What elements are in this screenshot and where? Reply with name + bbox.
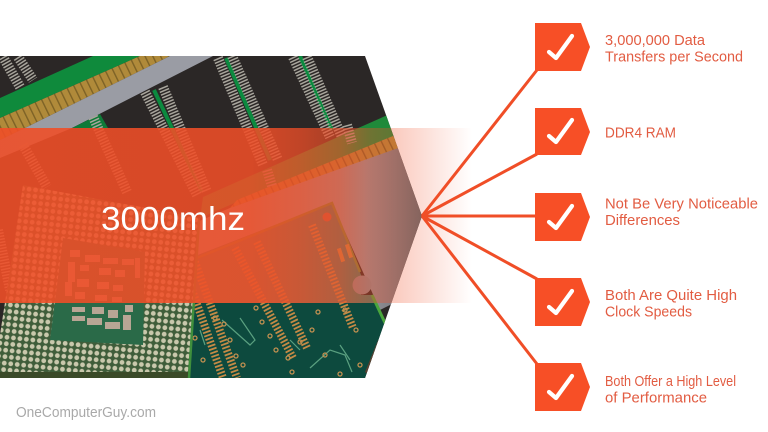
label: 3,000,000 Data Transfers per Second: Transfers per Second [605,48,743,66]
RAM module: green board, gold contacts, silver strip [0,56,213,158]
label: 3,000,000 Data Transfers per Second: 3,000,000 Data [605,32,706,49]
label: Not Be Very Noticeable Differences: Not Be Very Noticeable [605,196,758,212]
label: Not Be Very Noticeable Differences: Differences [605,212,680,229]
label: Both Are Quite High Clock Speeds [605,287,737,320]
label: Both Offer a High Level of Performance: Both Offer a High Level [605,373,736,390]
label: DDR4 RAM: DDR4 RAM [605,124,676,142]
label: 3,000,000 Data Transfers per Second [605,32,743,66]
label: Both Offer a High Level of Performance [605,373,736,406]
green circuit board with traces [190,202,386,378]
BGA processor chip with solder ball grid [0,180,203,380]
icon: check badge 5 [535,363,590,411]
connector lines from hexagon tip to check badges [422,70,537,364]
title: 3000mhz: 3000mhz [101,200,245,237]
label: Both Offer a High Level of Performance: of Performance [605,390,707,406]
icon: check badge 3 [535,193,590,241]
icon: check badge 1 [535,23,590,71]
watermark: OneComputerGuy.com: OneComputerGuy.com [16,404,156,421]
horizontal orange band fading to white [0,128,472,303]
memory chip pins, upper row [0,56,342,290]
label: Both Are Quite High Clock Speeds: Both Are Quite High [605,287,737,304]
second RAM module: green board, gold contacts, silver strip [197,113,422,310]
photo: memory modules and circuit boards [0,56,422,380]
label: Both Are Quite High Clock Speeds: Clock Speeds [605,304,692,320]
label: Not Be Very Noticeable Differences [605,196,758,229]
icon: check badge 4 [535,278,590,326]
icon: check badge 2 [535,108,590,155]
